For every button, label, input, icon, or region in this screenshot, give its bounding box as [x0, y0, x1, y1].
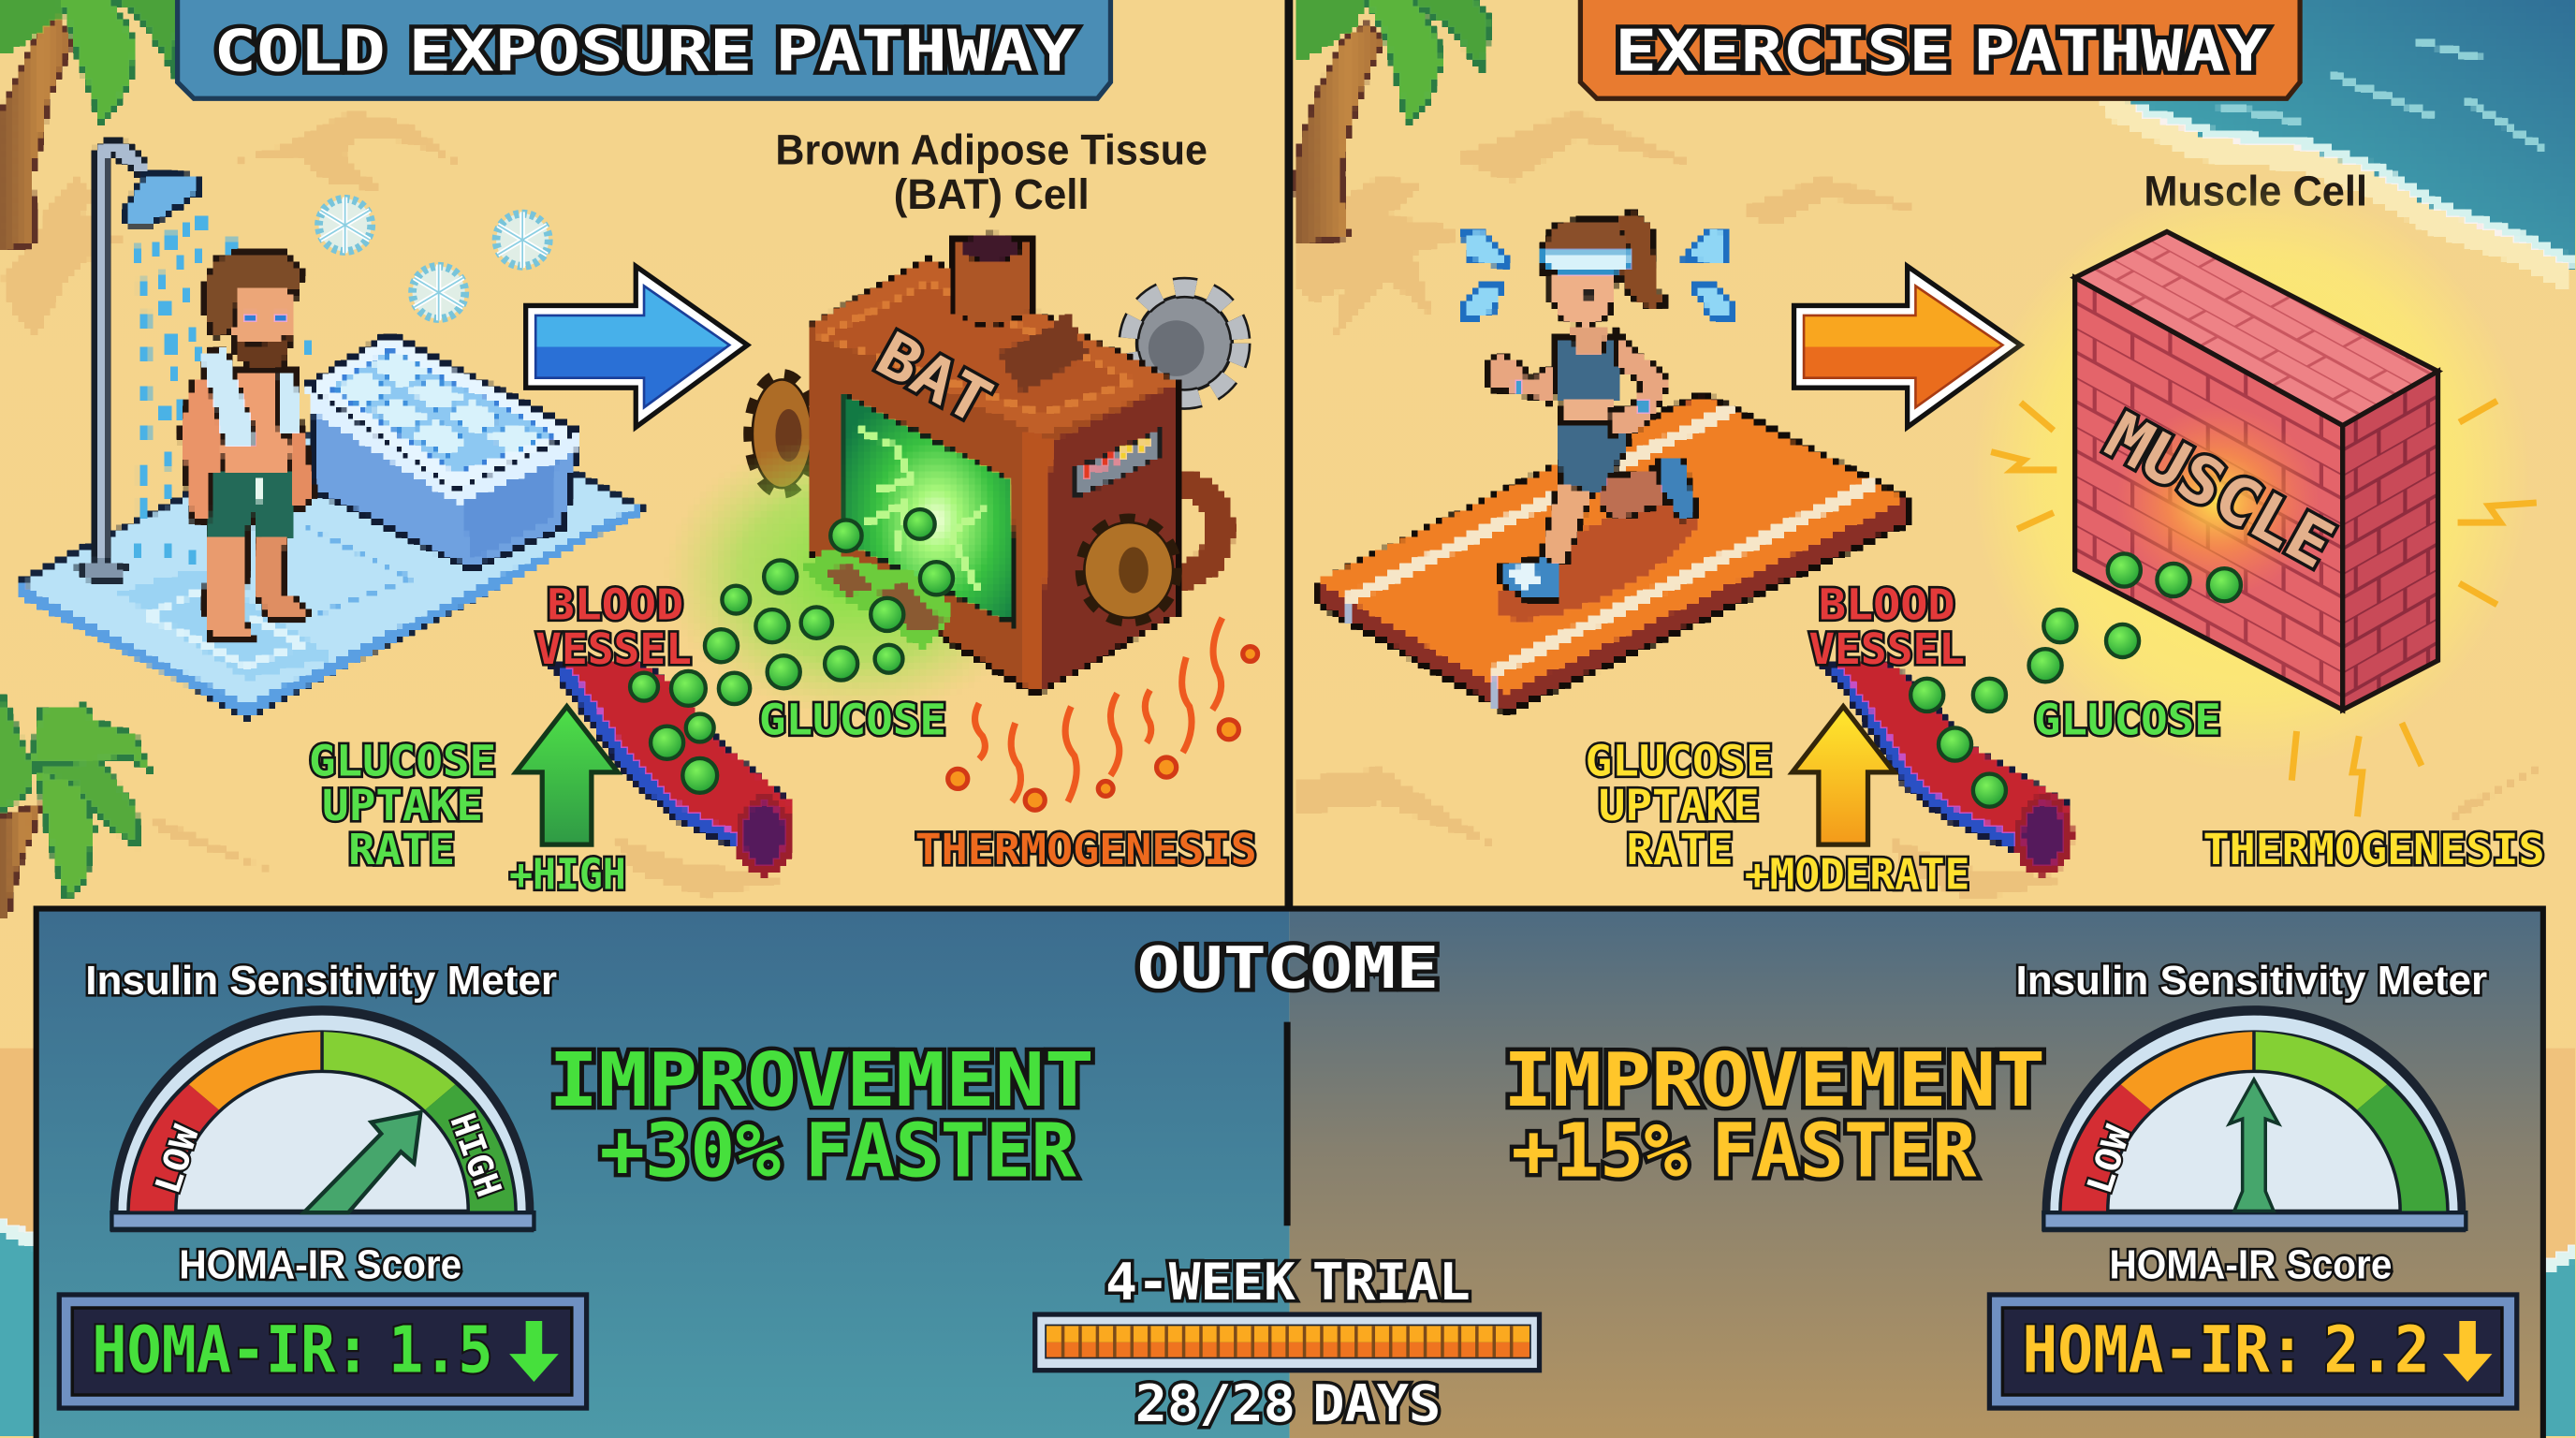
- panel: exercise pathway: [1316, 0, 2545, 899]
- label: glucose uptake rate: UPTAKE: [1599, 781, 1760, 830]
- label: blood vessel: VESSEL: [535, 624, 692, 674]
- glucose molecules: [630, 509, 953, 793]
- label: muscle: MUSCLE: [2093, 399, 2346, 583]
- icon: grey gear: [1129, 287, 1240, 399]
- needle: [2230, 1079, 2278, 1211]
- heading: outcome: OUTCOME: [1137, 935, 1439, 1002]
- runner character: [1486, 211, 1697, 600]
- heading: exercise pathway: EXERCISE PATHWAY: [1615, 18, 2267, 84]
- improvement callout: left: IMPROVEMENT: [549, 1037, 1094, 1123]
- improvement callout: left: +30% FASTER: [600, 1108, 1076, 1195]
- icon: snowflakes: [319, 198, 549, 320]
- trial progress: 4-WEEK TRIAL: [1105, 1253, 1471, 1312]
- label: glucose uptake rate: GLUCOSE: [1586, 736, 1773, 785]
- BAT cell caption: [775, 126, 1208, 218]
- BAT cell caption: Brown Adipose Tissue: [775, 126, 1208, 174]
- improvement callout: right: [1503, 1037, 2045, 1195]
- icon: left rust gear: [749, 374, 815, 493]
- trial progress: [1035, 1253, 1540, 1433]
- HOMA-IR readout: left: [59, 1295, 587, 1408]
- label: blood vessel: [535, 580, 692, 674]
- icon: sweat drops: [1462, 230, 1732, 320]
- icon: energy sparks: [1991, 401, 2537, 816]
- panel: outcome: [37, 909, 2543, 1438]
- insulin sensitivity gauge: left: LOW: [147, 1120, 207, 1198]
- track mat: [1316, 394, 1908, 712]
- HOMA-IR readout: right: [1989, 1295, 2517, 1408]
- label: blood vessel: VESSEL: [1808, 624, 1965, 674]
- palm tree: exercise panel: [1295, 0, 1490, 243]
- palm tree: bottom left: [0, 694, 150, 917]
- label: thermogenesis: THERMOGENESIS: [2203, 825, 2545, 874]
- platform floor: [18, 385, 641, 716]
- palm tree: top left: [0, 0, 178, 250]
- glucose molecules: [1910, 553, 2241, 807]
- heading: exercise pathway: [1580, 0, 2300, 98]
- muscle brick wall: [1971, 181, 2530, 772]
- panel: cold exposure pathway: [18, 0, 1258, 899]
- label: glucose uptake rate: [309, 736, 496, 874]
- BAT machine: [805, 235, 1178, 694]
- sand dunes and palm shadows: [4, 111, 2546, 901]
- label: blood vessel: [1808, 580, 1965, 674]
- label: glucose: GLUCOSE: [759, 695, 946, 744]
- insulin sensitivity gauge: right: LOW: [2079, 1120, 2139, 1198]
- flames: [975, 618, 1222, 801]
- muscle cell caption: Muscle Cell: [2144, 167, 2367, 214]
- glow: green energy: [666, 435, 1044, 714]
- heading: cold exposure pathway: COLD EXPOSURE PATHWAY: [213, 18, 1076, 84]
- label: thermogenesis: THERMOGENESIS: [915, 825, 1257, 874]
- HOMA-IR readout: right: HOMA-IR: 2.2: [2022, 1313, 2430, 1387]
- trial progress: 28/28 DAYS: [1135, 1374, 1441, 1433]
- label: glucose uptake rate: GLUCOSE: [309, 736, 496, 785]
- label: glucose uptake rate: RATE: [1627, 825, 1734, 874]
- HOMA-IR caption: left: HOMA-IR Score: [179, 1241, 461, 1287]
- HOMA-IR caption: right: HOMA-IR Score: [2110, 1241, 2392, 1287]
- shower: [79, 148, 313, 580]
- ocean: top right: [2080, 0, 2576, 292]
- arrow: high uptake: [516, 707, 618, 844]
- needle: [304, 1112, 420, 1212]
- progress segments: [1046, 1326, 1530, 1357]
- HOMA-IR readout: left: HOMA-IR: 1.5: [92, 1313, 493, 1387]
- pipe: [1150, 484, 1220, 579]
- arrow: moderate uptake: [1793, 707, 1895, 844]
- insulin sensitivity gauge: left: [110, 1005, 534, 1232]
- insulin sensitivity gauge: left: HIGH: [442, 1108, 509, 1202]
- label: glucose: GLUCOSE: [2034, 695, 2221, 744]
- BAT cell caption: (BAT) Cell: [894, 170, 1090, 218]
- label: glucose uptake rate: RATE: [348, 825, 455, 874]
- label: +moderate: +MODERATE: [1745, 849, 1969, 899]
- improvement callout: right: +15% FASTER: [1512, 1108, 1977, 1195]
- heading: cold exposure pathway: [178, 0, 1110, 98]
- improvement callout: left: [549, 1037, 1094, 1195]
- panel divider: [1284, 0, 1293, 907]
- insulin sensitivity gauge: right: [2042, 1005, 2466, 1232]
- ice bath tub: [307, 335, 578, 568]
- label: +high: +HIGH: [509, 849, 626, 899]
- label: glucose uptake rate: [1586, 736, 1773, 874]
- label: glucose uptake rate: UPTAKE: [322, 781, 483, 830]
- label: BAT: BAT: [865, 320, 1003, 438]
- gauge caption: right: Insulin Sensitivity Meter: [2015, 958, 2487, 1004]
- label: blood vessel: BLOOD: [1819, 580, 1955, 630]
- improvement callout: right: IMPROVEMENT: [1503, 1037, 2045, 1123]
- label: blood vessel: BLOOD: [547, 580, 683, 630]
- blood vessel: [1825, 663, 2069, 871]
- man character: [181, 253, 314, 638]
- arrow: cold to BAT: [526, 266, 748, 427]
- gauge caption: left: Insulin Sensitivity Meter: [85, 958, 557, 1004]
- embers: [948, 647, 1258, 810]
- ocean: bottom corners: [0, 1051, 2576, 1438]
- arrow: exercise to muscle: [1794, 266, 2021, 427]
- blood vessel: [550, 663, 792, 871]
